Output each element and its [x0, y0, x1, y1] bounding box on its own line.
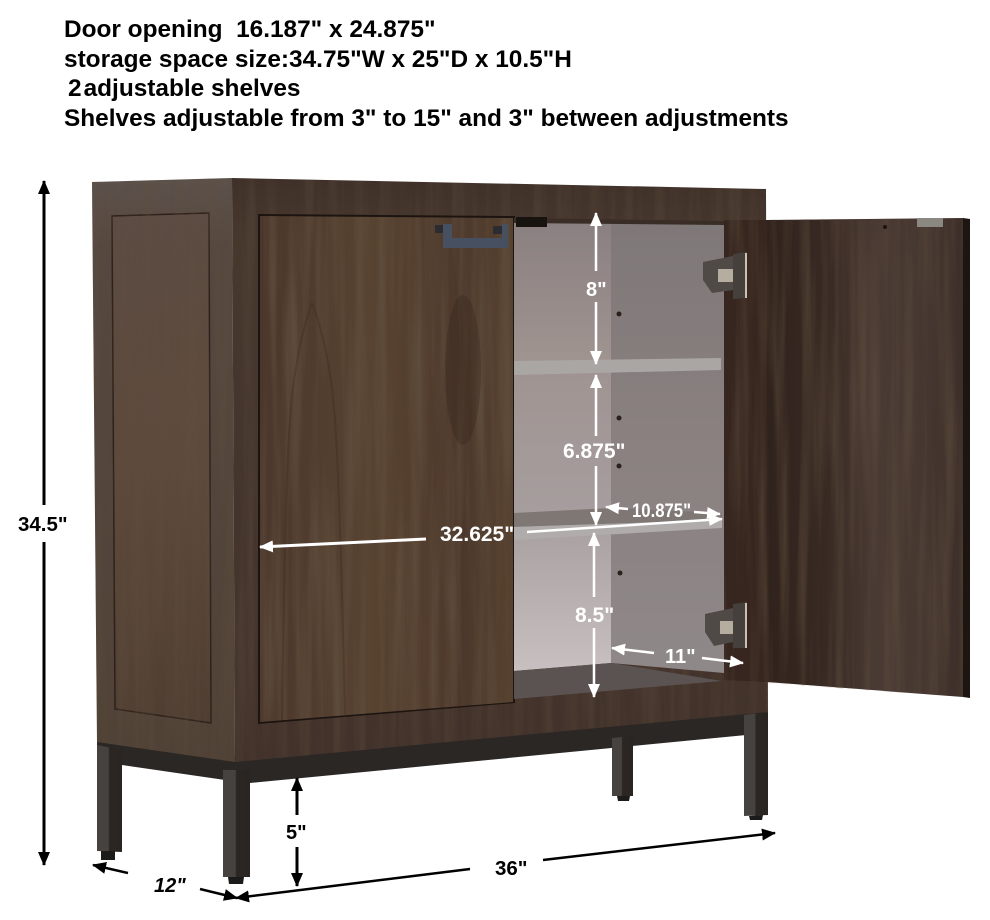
- door handle: [435, 224, 508, 248]
- dimension: middle compartment 6.875 inches: 6.875": [563, 440, 626, 463]
- dimension: base depth 11 inches: [612, 646, 743, 668]
- heading: specifications: [64, 16, 789, 132]
- heading: specifications: storage space size:34.75"W x 25"D x 10.5"H: [64, 46, 572, 73]
- heading: specifications: 2adjustable shelves: [68, 75, 300, 102]
- dimension: width 36 inches: [236, 833, 775, 898]
- cabinet interior: [514, 217, 724, 699]
- heading: specifications: Shelves adjustable from 3" to 15" and 3" between adjustments: [64, 105, 789, 132]
- dimension: top compartment 8 inches: 8": [586, 279, 607, 301]
- dimension: height 34.5 inches: 34.5": [18, 513, 68, 536]
- dimension: leg height 5 inches: 5": [286, 822, 307, 844]
- heading: specifications: Door opening 16.187" x 24.875": [64, 16, 436, 43]
- right door: [724, 218, 970, 698]
- upper hinge: [703, 252, 747, 299]
- cabinet front frame: [232, 178, 768, 762]
- upper shelf: [514, 358, 721, 375]
- dimension: bottom compartment 8.5 inches: 8.5": [575, 604, 614, 627]
- dimension: leg height 5 inches: [286, 778, 307, 886]
- dimension: width 36 inches: 36": [495, 857, 528, 880]
- dimension: interior width 32.625 inches: 32.625": [440, 523, 514, 546]
- lower shelf: [514, 508, 722, 540]
- dimension: depth 12 inches: [93, 865, 237, 898]
- cabinet side panel: [92, 178, 235, 762]
- dimension: interior width 32.625 inches: [260, 523, 514, 547]
- dimension: shelf depth 10.875 inches: 10.875": [632, 501, 691, 522]
- latch: [516, 217, 547, 227]
- dimension: depth 12 inches: 12": [154, 875, 186, 897]
- cabinet legs and base: [97, 705, 768, 884]
- left door: [260, 216, 513, 722]
- cabinet: [92, 178, 970, 884]
- dimension: base depth 11 inches: 11": [665, 646, 696, 668]
- lower hinge: [705, 602, 747, 648]
- dimension: shelf depth 10.875 inches: [527, 501, 722, 532]
